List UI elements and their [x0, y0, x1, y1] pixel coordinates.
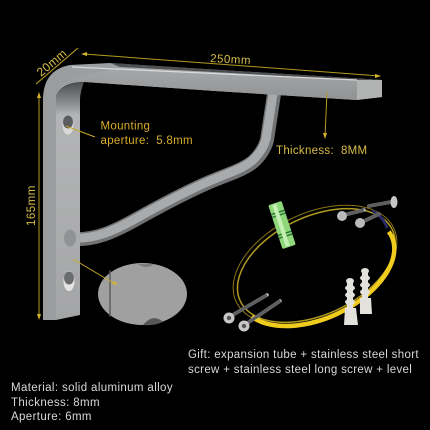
- material specs text: Thickness: 8mm: [11, 397, 100, 409]
- callout: mounting aperture: [66, 120, 193, 147]
- short screws: [337, 196, 398, 228]
- yellow cable ring: [214, 181, 416, 350]
- expansion tubes: [344, 268, 372, 325]
- callout: mounting aperture: aperture: 5.8mm: [100, 135, 193, 147]
- gift accessories: [214, 181, 416, 350]
- callout: thickness: Thickness: 8MM: [276, 145, 367, 157]
- bracket arm highlight: [72, 67, 357, 80]
- dimension: 165mm: [26, 92, 41, 320]
- lower mounting hole: [64, 271, 74, 291]
- callout: mounting aperture: Mounting: [100, 120, 150, 132]
- gift text: Gift: expansion tube + stainless steel short: [188, 349, 419, 361]
- dimension: 165mm: 165mm: [26, 185, 38, 226]
- callout: thickness: [276, 92, 367, 157]
- dimension: 250mm: 250mm: [210, 53, 251, 67]
- bracket tube brace: [70, 94, 274, 239]
- dimension: 20mm: 20mm: [34, 46, 70, 79]
- gift text: screw + stainless steel long screw + level: [188, 364, 412, 376]
- long screws: [224, 295, 280, 332]
- bracket arm end face: [357, 80, 382, 100]
- bracket arm front face: [70, 67, 357, 100]
- dimension: 250mm: [81, 52, 381, 78]
- spirit level: [268, 201, 296, 249]
- bracket arm and upright outline: [43, 63, 382, 320]
- material specs text: [11, 382, 173, 423]
- bracket top dark face: [110, 63, 382, 80]
- bracket upright front face: [56, 82, 84, 320]
- material specs text: Material: solid aluminum alloy: [11, 382, 173, 394]
- tube collar: [64, 230, 76, 246]
- magnified surface detail: [98, 263, 187, 325]
- callout arrow to magnified detail: [73, 259, 118, 285]
- upper mounting hole: [62, 116, 74, 134]
- bracket: [43, 63, 382, 320]
- material specs text: Aperture: 6mm: [11, 411, 92, 423]
- gift text: [188, 349, 419, 376]
